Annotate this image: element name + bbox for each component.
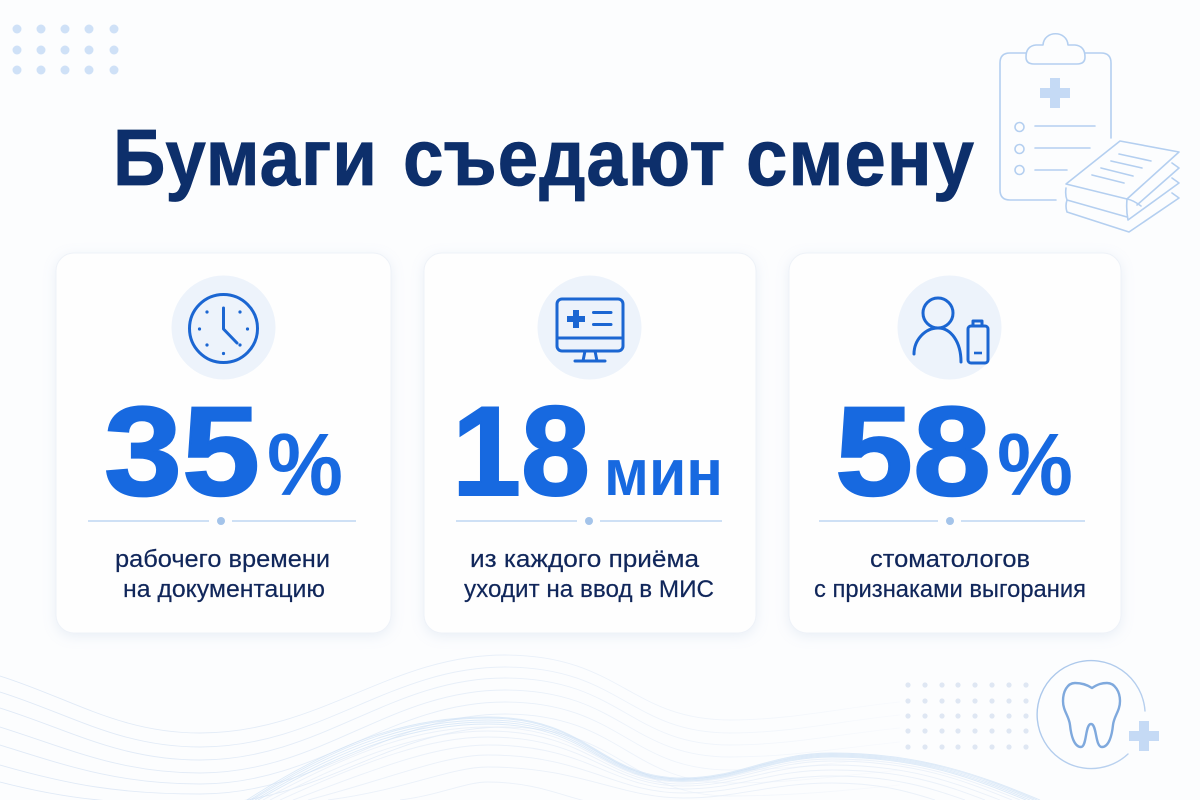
stat: 18 мин [452,380,723,522]
icon: monitor [538,276,642,380]
stat: 18 мин: мин [604,435,723,509]
text: card 3 label: стоматологов [870,546,1030,573]
stat: 58% [835,380,1073,522]
dot grid: bottom right [905,682,1029,750]
icon: person with low battery [898,276,1002,380]
divider [456,517,722,525]
panel: card 2 [424,253,756,633]
title: съедают [403,113,726,202]
panel: card 1 [56,253,391,633]
title: Бумаги [113,113,378,202]
text: card 2 label: из каждого приёма [470,546,700,573]
stat: 35% [104,380,343,522]
title: смену [746,113,975,202]
text: card 2 label [464,546,714,603]
panel: card 3 [789,253,1121,633]
stat: 58%: 58 [835,380,991,522]
text: card 1 label: на документацию [123,576,325,603]
divider [819,517,1085,525]
text: card 2 label: уходит на ввод в МИС [464,576,714,603]
stat: 18 мин: 18 [452,380,590,522]
dot grid: top left [12,24,118,74]
stat: 35%: 35 [104,380,260,522]
text: card 3 label [814,546,1086,603]
icon: tooth with plus [1037,661,1159,769]
text: card 3 label: с признаками выгорания [814,576,1086,603]
text: card 1 label [115,546,330,603]
text: card 1 label: рабочего времени [115,546,330,573]
decorative waves [0,655,1040,800]
divider [88,517,356,525]
stat: 35%: % [267,415,343,514]
title [113,113,975,202]
icon: clipboard with papers [1000,34,1179,232]
stat: 58%: % [997,415,1073,514]
icon: clock [172,276,276,380]
